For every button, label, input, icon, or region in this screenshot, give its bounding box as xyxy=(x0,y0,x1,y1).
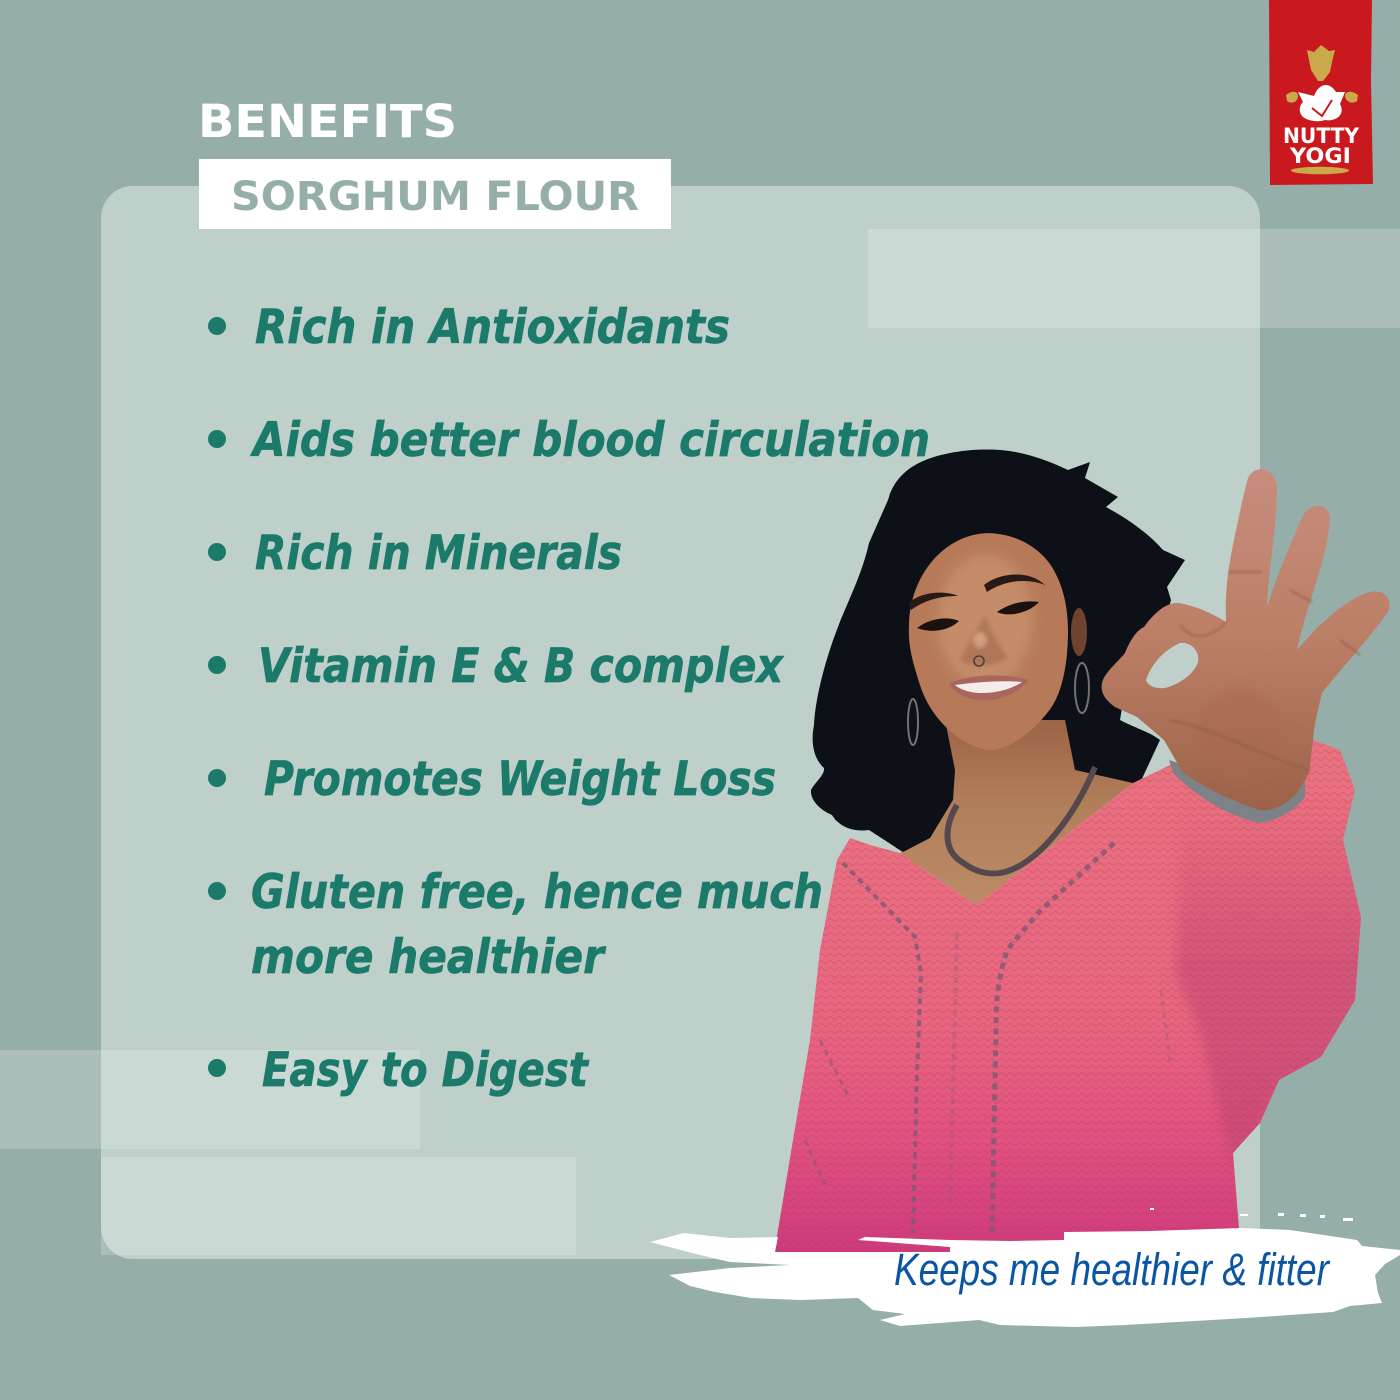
white brush stroke xyxy=(650,1228,1400,1327)
right eye xyxy=(997,601,1039,614)
front hair xyxy=(895,495,1090,630)
item: gluten free: Gluten free, hence much xyxy=(251,865,823,920)
item: weight loss: Promotes Weight Loss xyxy=(264,752,776,807)
smile xyxy=(949,675,1028,700)
logo red tag xyxy=(1269,0,1373,185)
nose tip highlight xyxy=(973,632,987,648)
shirt cuff xyxy=(1169,760,1305,823)
logo wordmark second line: YOGI xyxy=(1289,144,1351,168)
earrings xyxy=(908,663,1089,745)
left hair lock xyxy=(835,650,955,852)
nose ring xyxy=(974,656,984,666)
sweater seams xyxy=(805,843,1170,1233)
logo yogi hands xyxy=(1286,92,1358,103)
photo: woman making ok gesture xyxy=(774,450,1390,1254)
sleeve shading xyxy=(1174,858,1361,1162)
hand xyxy=(1102,469,1390,810)
decorative band top right xyxy=(868,229,1400,328)
decorative band left xyxy=(0,1050,420,1149)
heading: benefits: BENEFITS xyxy=(198,95,457,148)
panel: benefits card xyxy=(101,186,1260,1259)
ear xyxy=(1071,608,1087,656)
finger creases xyxy=(1170,572,1360,770)
face xyxy=(909,533,1068,750)
heading box: sorghum flour: SORGHUM FLOUR xyxy=(231,174,639,220)
left eye xyxy=(917,618,959,631)
neck and chest xyxy=(900,720,1133,905)
brush speckles xyxy=(1150,1208,1353,1221)
brush stroke with tagline xyxy=(650,1208,1400,1327)
logo yogi head xyxy=(1307,45,1335,81)
necklace xyxy=(947,767,1095,874)
item: gluten free xyxy=(208,865,823,985)
logo gold shadow xyxy=(1291,167,1349,174)
left eyebrow xyxy=(909,593,958,610)
palm shading xyxy=(1195,690,1285,780)
logo wordmark: NUTTY xyxy=(1283,124,1360,148)
sweater knit texture xyxy=(774,740,1361,1254)
item: vitamins: Vitamin E & B complex xyxy=(258,639,784,694)
benefits list xyxy=(208,300,930,1098)
item: digestion: Easy to Digest xyxy=(262,1043,589,1098)
item: blood circulation: Aids better blood circulation xyxy=(249,413,930,468)
decorative band bottom xyxy=(101,1157,576,1255)
face highlight xyxy=(937,554,1033,686)
back hair xyxy=(811,450,1185,852)
heading box: sorghum flour xyxy=(199,159,671,229)
sweater body xyxy=(774,740,1361,1254)
okay sign hole xyxy=(1146,643,1198,688)
logo knotted body xyxy=(1298,85,1345,121)
nose xyxy=(960,615,1008,666)
logo: nutty yogi xyxy=(1269,0,1373,185)
item: antioxidants: Rich in Antioxidants xyxy=(255,300,730,355)
logo knot detail xyxy=(1312,100,1332,116)
right eyebrow xyxy=(984,574,1045,592)
item: minerals: Rich in Minerals xyxy=(255,526,622,581)
item: gluten free: more healthier xyxy=(251,930,607,985)
